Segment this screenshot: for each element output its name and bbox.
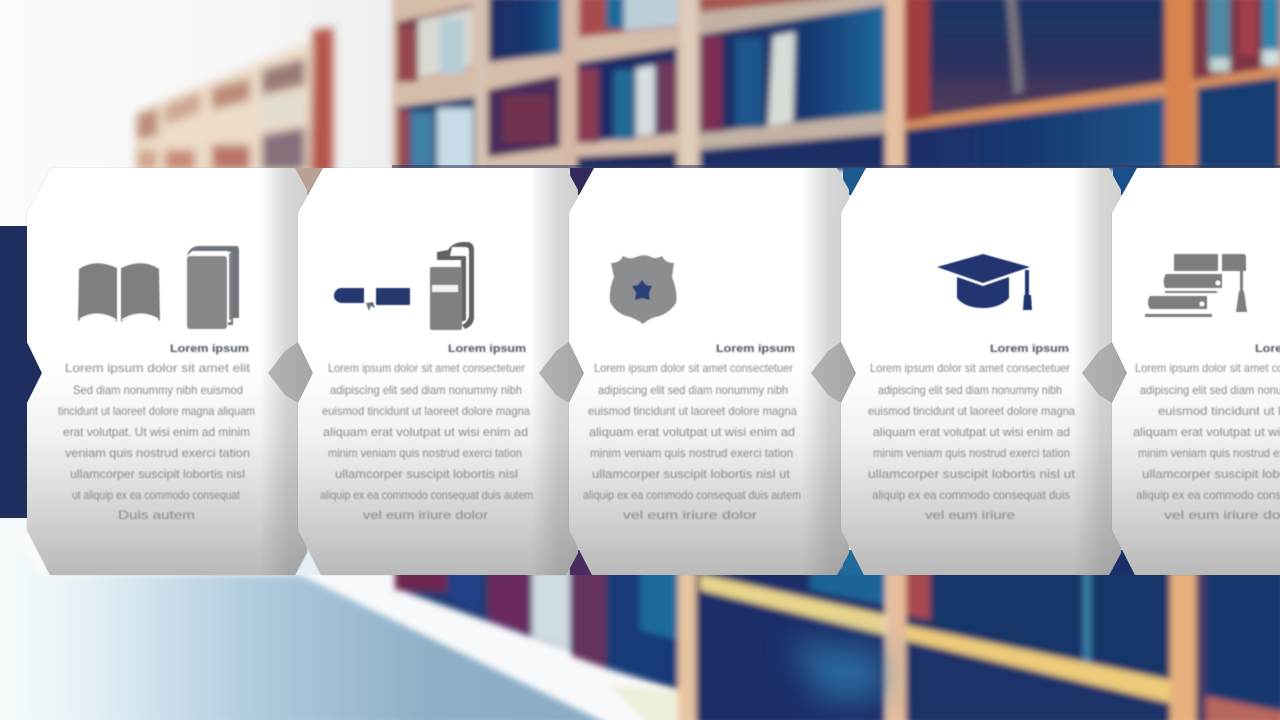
connector diamond 3: [811, 342, 856, 403]
background: floor: [0, 520, 610, 720]
panel: card 1: [27, 168, 313, 575]
icon: graduation cap: [937, 254, 1032, 310]
text block: adipiscing elit sed diam nonummy nibh: [330, 383, 522, 397]
text block: [868, 361, 1076, 522]
text block: minim veniam quis nostrud exerci tation: [873, 446, 1070, 460]
background: dark top edge above cards: [392, 165, 1280, 168]
text block: vel eum iriure: [925, 508, 1015, 522]
text block: ullamcorper suscipit lobortis nisl: [335, 467, 518, 481]
text block: [58, 361, 255, 522]
icon: diploma scroll: [334, 288, 410, 311]
icon: upright book stack: [430, 242, 474, 330]
text block: aliquip ex ea commodo consequat duis autem: [583, 488, 801, 502]
connector diamond 2: [539, 342, 584, 403]
heading: Lorem ipsum: [448, 343, 526, 355]
text block: minim veniam quis nostrud exerci tation: [590, 446, 793, 460]
connector diamond 4: [1082, 342, 1127, 403]
background: gap wedges bottom: [296, 550, 1139, 575]
text block: aliquam erat volutpat ut wisi enim ad: [873, 425, 1070, 439]
text block: erat volutpat. Ut wisi enim ad minim: [63, 425, 250, 439]
icon: stack of books with tassel: [1145, 254, 1247, 317]
text block: ullamcorper suscipit lobortis nisl ut: [868, 467, 1076, 481]
background: lower bookshelf: [395, 565, 1280, 720]
text block: vel eum iriure dolor: [1164, 508, 1280, 522]
text block: euismod tincidunt ut laoreet dolore magna: [868, 404, 1075, 418]
icon: closed book: [187, 246, 239, 329]
text block: aliquam erat volutpat ut wisi enim ad: [589, 425, 795, 439]
navy side arrow: [0, 226, 42, 518]
text block: adipiscing elit sed diam nonummy nibh: [878, 383, 1062, 397]
heading: Lorem ipsum: [716, 343, 795, 355]
text block: tincidunt ut laoreet dolore magna aliquam: [58, 404, 255, 418]
background: main bookshelf frame: [392, 0, 1280, 170]
text block: ullamcorper suscipit lobortis nisl: [70, 467, 245, 481]
panel: card 4: [841, 168, 1127, 575]
text block: [320, 361, 533, 522]
text block: Lorem ipsum dolor sit amet consectetuer: [594, 361, 793, 375]
text block: aliquip ex ea commodo consequat duis autem: [320, 488, 533, 502]
heading: Lorem ipsum: [170, 343, 249, 355]
text block: Lorem ipsum dolor sit amet consectetuer: [328, 361, 525, 375]
text block: ut aliquip ex ea commodo consequat: [72, 488, 241, 502]
panel: card 2: [298, 168, 584, 575]
text block: adipiscing elit sed diam nonummy nibh: [598, 383, 788, 397]
text block: aliquip ex ea commodo consequat duis: [872, 488, 1070, 502]
text block: aliquam erat volutpat ut wisi enim ad: [323, 425, 528, 439]
background: distant bookshelf: [135, 28, 333, 175]
heading: Lorem ipsum: [990, 343, 1069, 355]
text block: Sed diam nonummy nibh euismod: [73, 383, 243, 397]
panel: card 5: [1112, 168, 1280, 575]
text block: euismod tincidunt ut laoreet dolore magna: [588, 404, 797, 418]
text block: Lorem ipsum dolor sit amet elit: [65, 361, 251, 375]
icon: police shield: [610, 255, 676, 324]
text block: veniam quis nostrud exerci tation: [65, 446, 250, 460]
icon: open book: [78, 263, 160, 322]
background: light blue shelf glow: [790, 640, 883, 700]
text block: minim veniam quis nostrud exerci tation: [328, 446, 522, 460]
text block: vel eum iriure dolor: [623, 508, 757, 522]
text block: vel eum iriure dolor: [363, 508, 488, 522]
connector diamond 1: [268, 342, 313, 403]
background: gap wedges top: [296, 168, 1139, 195]
text block: [1133, 361, 1280, 522]
text block: Duis autem: [118, 508, 195, 522]
text block: euismod tincidunt ut laoreet dolore magna: [322, 404, 530, 418]
panel: card 3: [569, 168, 856, 575]
text block: ullamcorper suscipit lobortis nisl ut: [592, 467, 791, 481]
text block: [583, 361, 801, 522]
text block: Lorem ipsum dolor sit amet consectetuer: [870, 361, 1070, 375]
